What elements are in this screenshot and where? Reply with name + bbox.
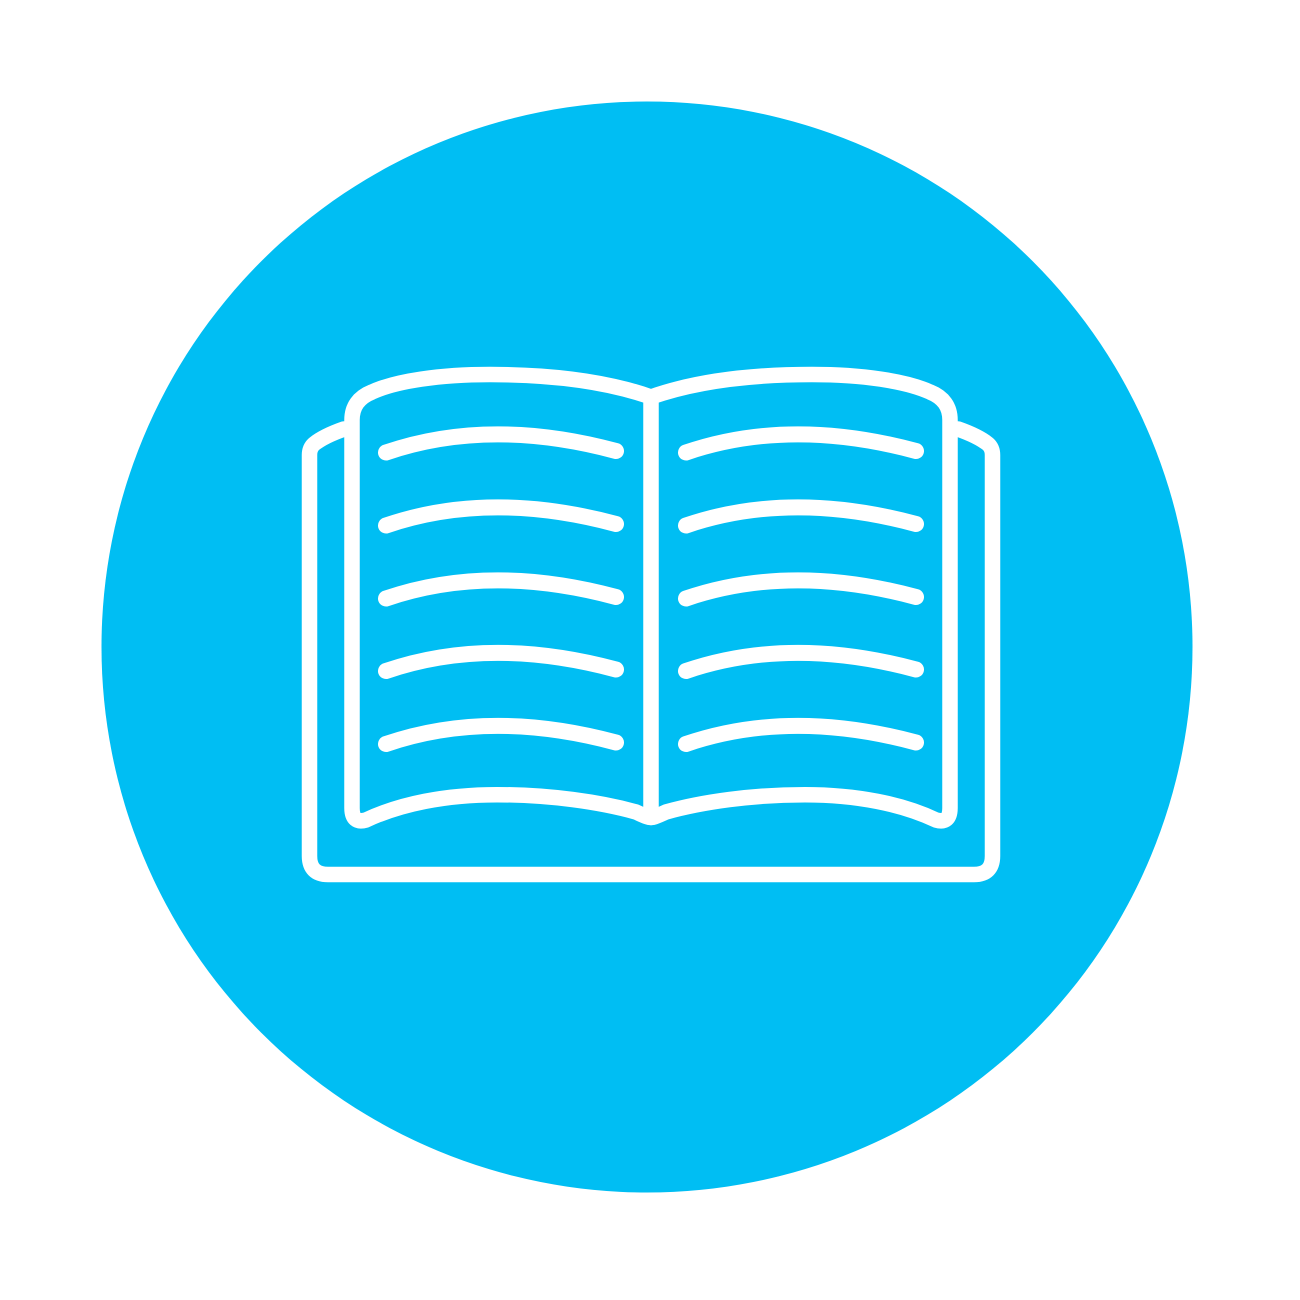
- right page text lines: [686, 434, 916, 744]
- left page outline: [352, 374, 651, 821]
- icon: open book: [310, 374, 992, 874]
- right page outline: [651, 374, 950, 821]
- blue circle background: [102, 102, 1192, 1192]
- left page text lines: [386, 434, 616, 744]
- book cover: [310, 429, 992, 874]
